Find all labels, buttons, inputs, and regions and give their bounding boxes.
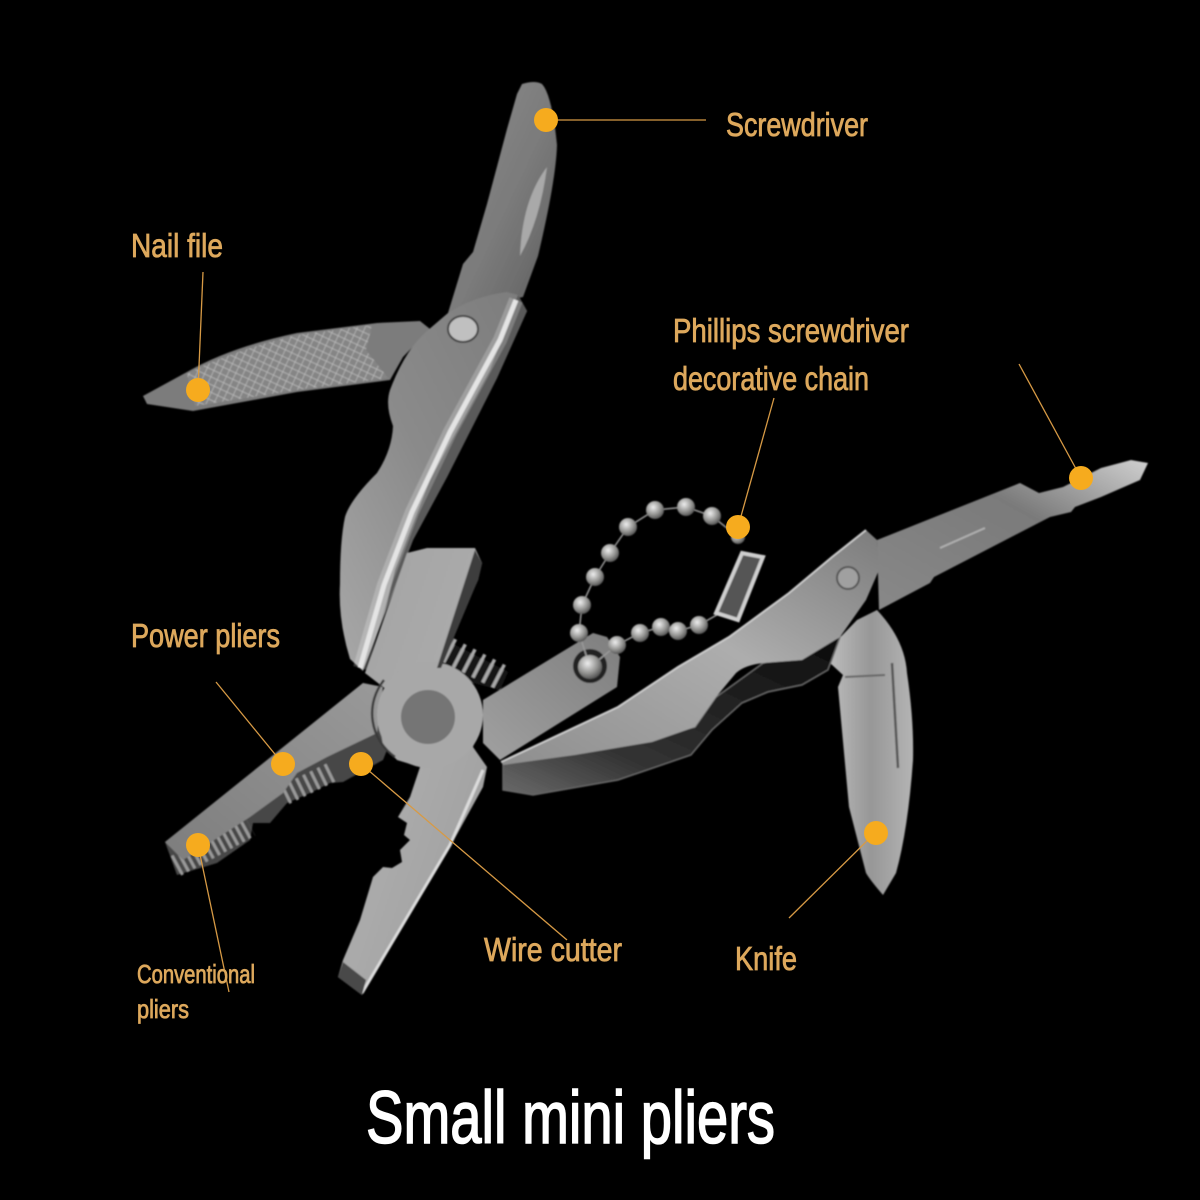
plier jaws and pivot ring [338, 548, 487, 995]
label: conventional pliers: pliers [137, 994, 189, 1024]
gripping jaw [165, 683, 395, 875]
phillips screwdriver bit [877, 460, 1148, 610]
chain [570, 498, 763, 679]
screwdriver blade [448, 82, 557, 313]
label: phillips screwdriver decorative chain: Phillips screwdriver [673, 312, 909, 349]
arm behind pivot [483, 633, 620, 760]
label: nail file: Nail file [131, 227, 223, 264]
marker dots [186, 108, 1093, 857]
knife blade [828, 610, 913, 895]
label: conventional pliers [137, 959, 255, 1024]
label: power pliers: Power pliers [131, 617, 280, 654]
label: phillips screwdriver decorative chain [673, 312, 909, 397]
lower right handle [501, 530, 879, 795]
label: wire cutter: Wire cutter [484, 931, 622, 968]
label: knife: Knife [735, 940, 797, 977]
label: conventional pliers: Conventional [137, 959, 255, 989]
leader lines [198, 120, 1081, 992]
multi-tool illustration [143, 82, 1148, 995]
spring [440, 640, 508, 690]
upper handle [340, 292, 527, 671]
label: screwdriver: Screwdriver [726, 106, 868, 143]
label: phillips screwdriver decorative chain: decorative chain [673, 360, 869, 397]
nail file [143, 321, 430, 411]
title: Small mini pliers [366, 1076, 775, 1159]
